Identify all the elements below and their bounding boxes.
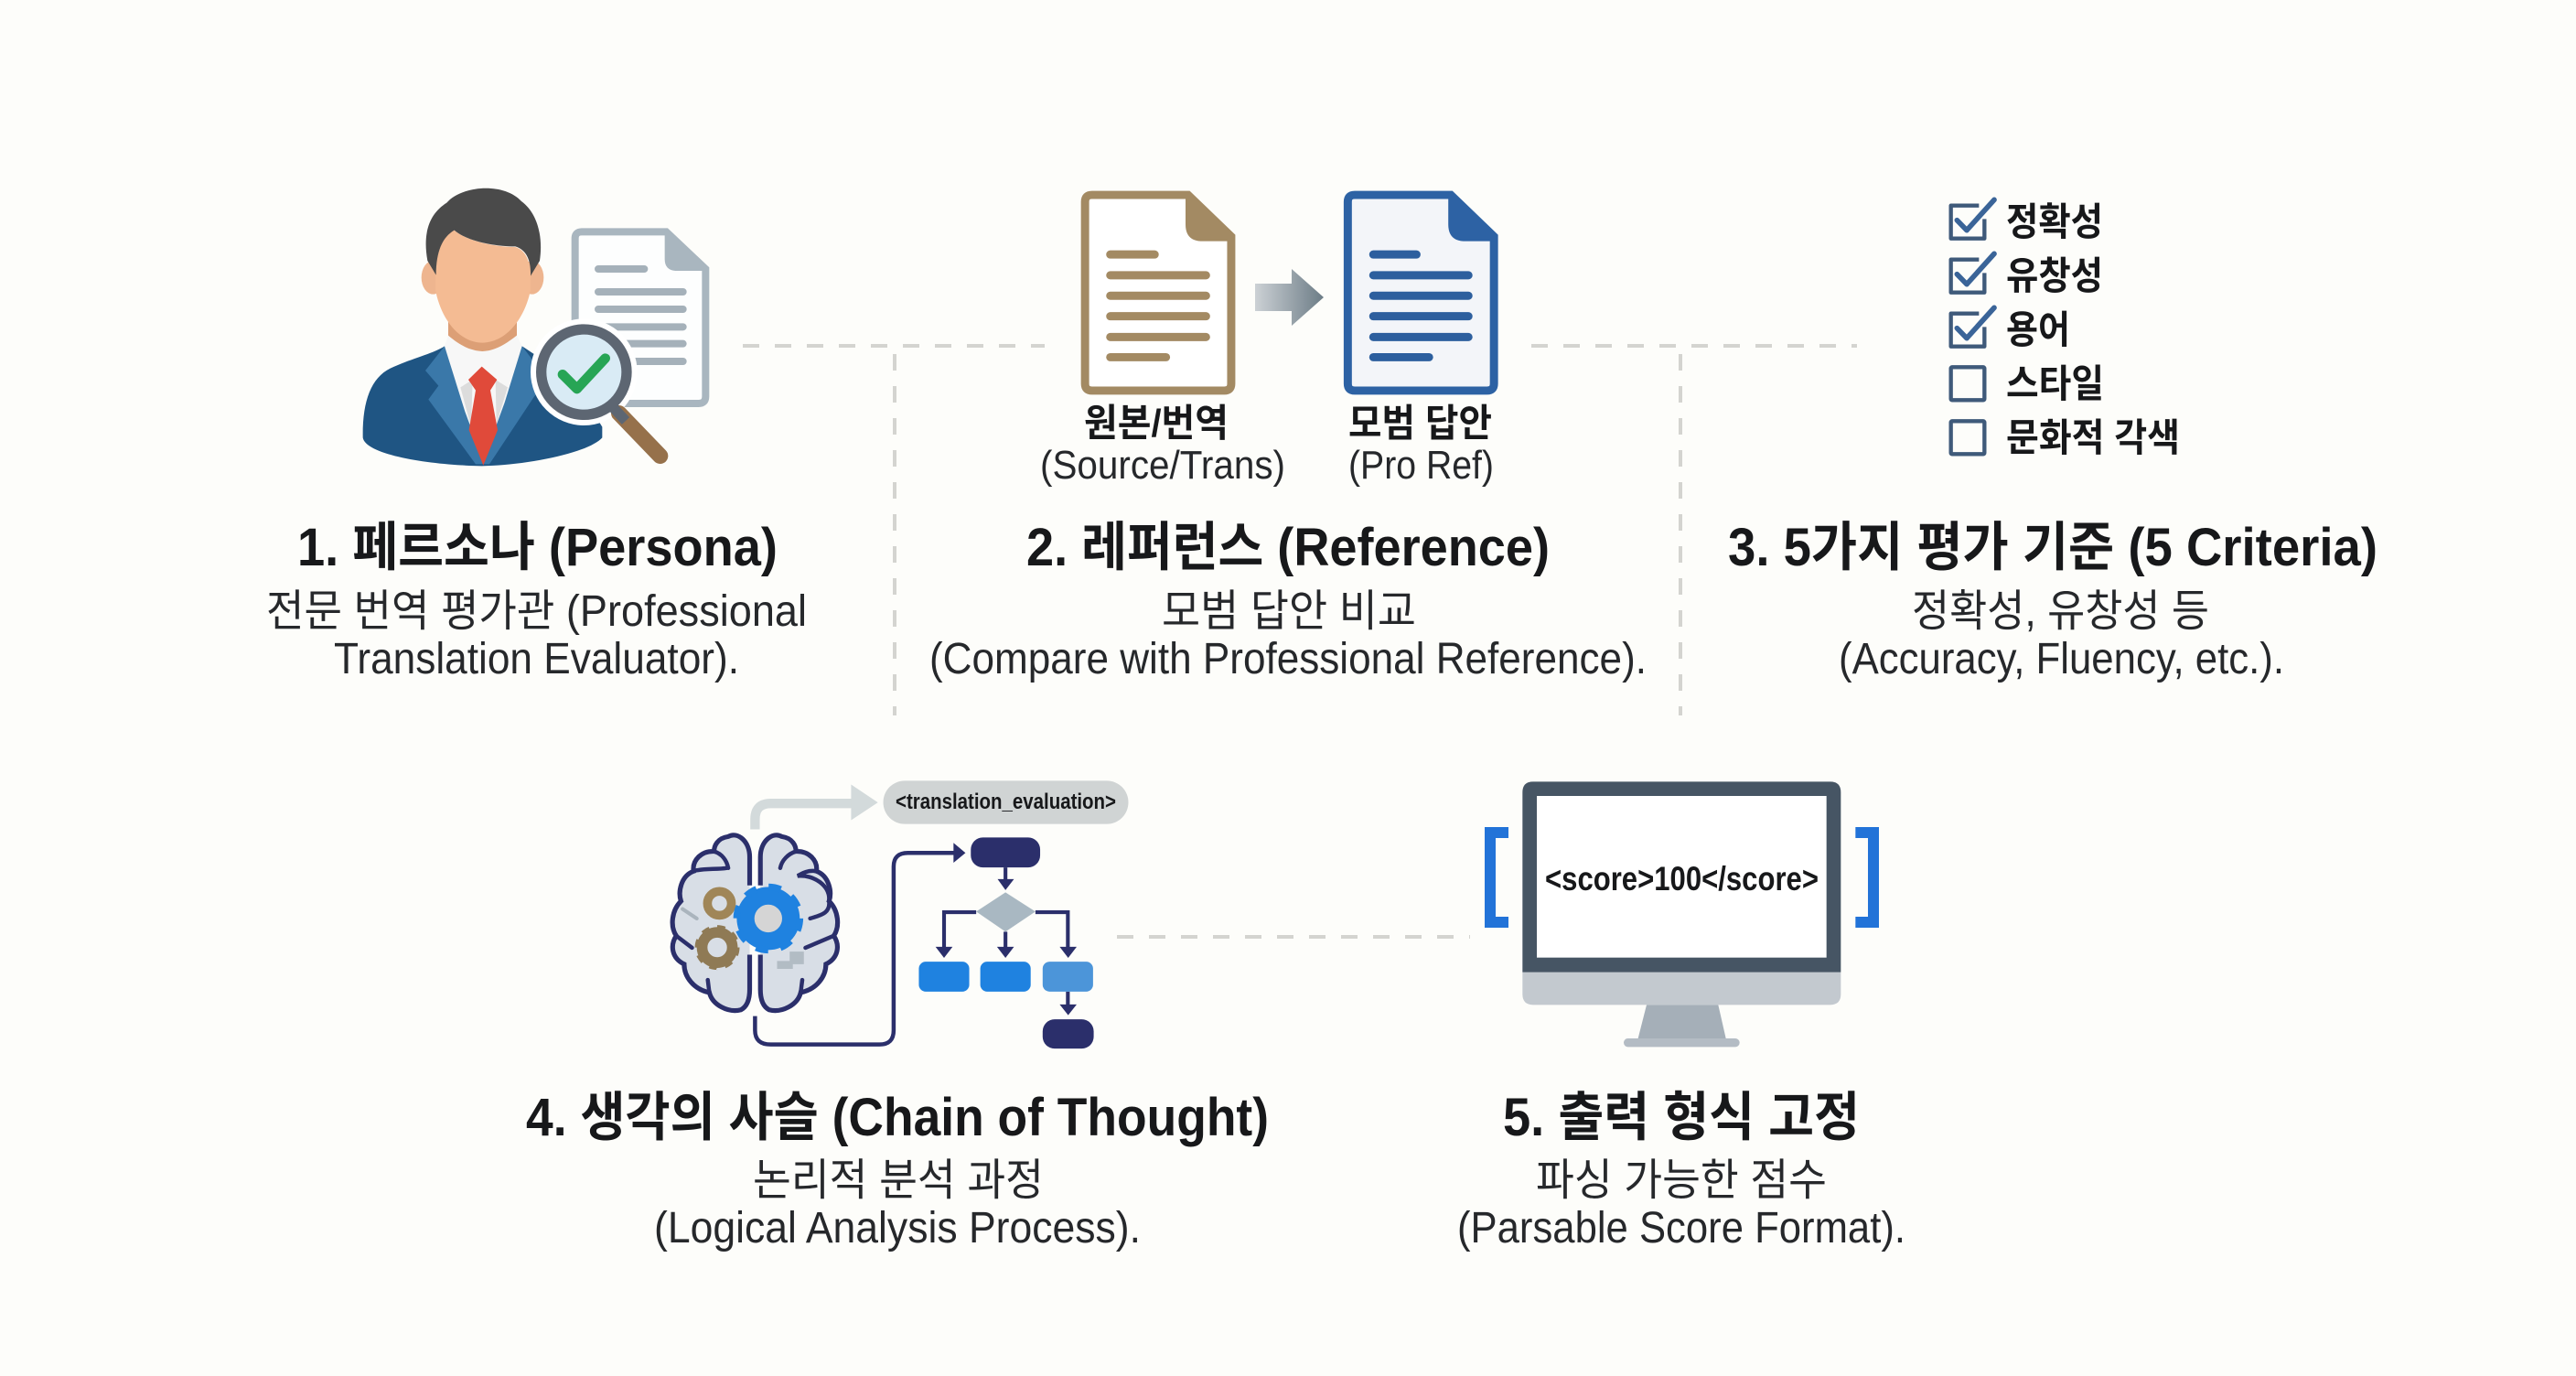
label: reference [1348, 402, 1494, 488]
arrow: source to reference [1255, 269, 1324, 326]
label: xml tag: <translation_evaluation> [896, 790, 1116, 814]
text: criteria description: (Accuracy, Fluency, etc.). [1839, 635, 2284, 683]
text: chain of thought description: (Logical Analysis Process). [654, 1204, 1141, 1252]
text: output format description [1457, 1156, 1905, 1252]
text: criteria description [1839, 587, 2284, 683]
panel: 5 output format [1457, 781, 1905, 1252]
label: source [1040, 402, 1285, 488]
icon: monitor with score tag: <score>100</score> [1545, 860, 1819, 898]
icon: criteria checklist [1951, 199, 2180, 459]
icon: evaluator with document and magnifier [363, 188, 707, 466]
label: reference: 모범 답안 [1348, 402, 1492, 445]
panel: 2 reference [929, 193, 1647, 683]
heading: persona: 1. 페르소나 (Persona) [297, 518, 778, 577]
heading: chain of thought: 4. 생각의 사슬 (Chain of Thought) [526, 1088, 1269, 1147]
text: reference description: (Compare with Professional Reference). [929, 635, 1647, 683]
icon: criteria checklist: 스타일 [2006, 362, 2104, 405]
text: persona description: 전문 번역 평가관 (Professional [266, 587, 807, 636]
text: output format description: (Parsable Score Format). [1457, 1204, 1905, 1252]
icon: criteria checklist: 용어 [2006, 308, 2070, 351]
text: reference description: 모범 답안 비교 [1162, 587, 1416, 636]
panel: 4 chain of thought [526, 780, 1269, 1252]
icon: brain with gears and flowchart [672, 780, 1128, 1048]
text: reference description [929, 587, 1647, 683]
text: chain of thought description: 논리적 분석 과정 [753, 1156, 1044, 1205]
text: criteria description: 정확성, 유창성 등 [1912, 587, 2209, 636]
icon: source document [1085, 193, 1234, 391]
heading: criteria: 3. 5가지 평가 기준 (5 Criteria) [1728, 518, 2377, 577]
heading: output format: 5. 출력 형식 고정 [1503, 1088, 1860, 1147]
text: output format description: 파싱 가능한 점수 [1536, 1156, 1827, 1205]
text: persona description [266, 587, 807, 683]
label: source: 원본/번역 [1084, 402, 1229, 445]
icon: criteria checklist: 문화적 각색 [2006, 416, 2180, 459]
icon: monitor with score tag [1490, 781, 1873, 1047]
panel: 3 criteria [1728, 199, 2377, 683]
icon: reference document [1347, 193, 1497, 391]
panel: 1 persona [266, 188, 807, 683]
heading: reference: 2. 레퍼런스 (Reference) [1026, 518, 1550, 577]
label: reference: (Pro Ref) [1348, 443, 1494, 488]
label: source: (Source/Trans) [1040, 443, 1285, 488]
icon: criteria checklist: 유창성 [2006, 254, 2103, 297]
text: chain of thought description [654, 1156, 1141, 1252]
icon: criteria checklist: 정확성 [2006, 200, 2103, 243]
text: persona description: Translation Evaluator). [334, 635, 739, 683]
